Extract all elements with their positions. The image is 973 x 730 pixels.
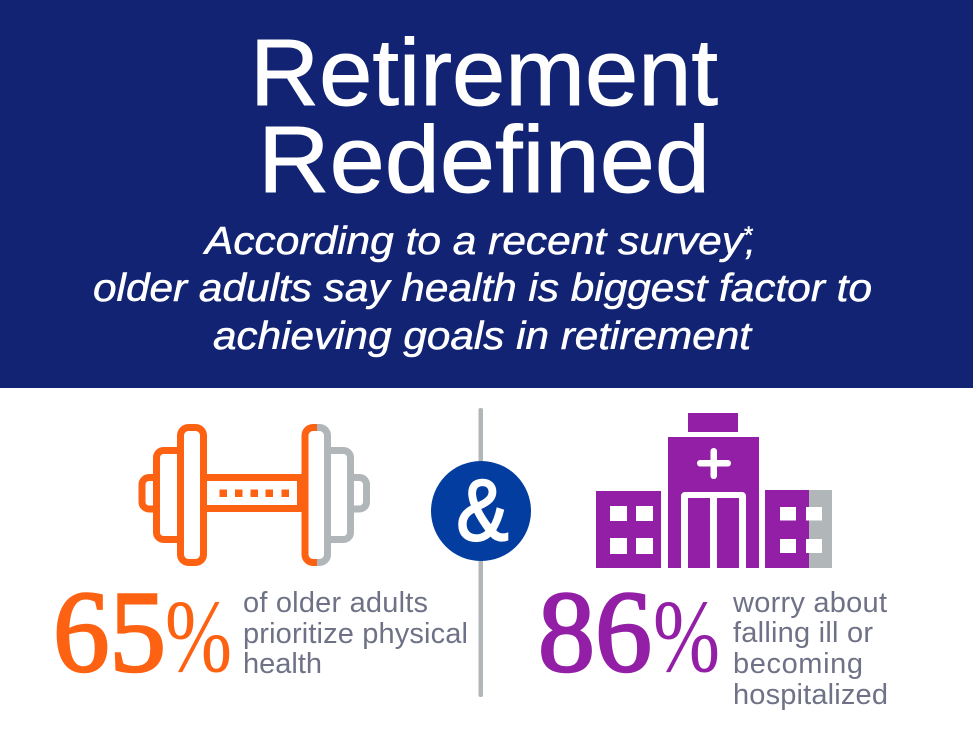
stat: 65 percent [53, 568, 232, 697]
header panel [0, 0, 973, 388]
center divider [478, 408, 483, 697]
title [250, 20, 718, 213]
subtitle [93, 220, 872, 358]
text: hospitalization description: hospitalized [733, 679, 888, 711]
subtitle: achieving goals in retirement [213, 315, 754, 358]
icon: hospital [596, 413, 832, 568]
stat: 86 percent: 86 [538, 568, 652, 697]
title: Redefined [258, 107, 710, 213]
stat: 86 percent [538, 568, 720, 697]
title: Retirement [250, 20, 718, 126]
icon: dumbbell [142, 428, 366, 562]
stat: 65 percent: 65 [53, 568, 166, 697]
stat: 65 percent: % [165, 579, 232, 694]
ampersand badge [431, 461, 531, 561]
subtitle: * [743, 222, 753, 249]
text: physical health description [243, 587, 468, 680]
text: hospitalization description: falling ill or [733, 617, 873, 649]
text: physical health description: prioritize physical [243, 618, 468, 650]
text: physical health description: health [243, 648, 322, 680]
subtitle: older adults say health is biggest factor to [93, 267, 872, 310]
text: hospitalization description: worry about [732, 587, 887, 619]
text: physical health description: of older adults [243, 587, 428, 619]
stat: 86 percent: % [653, 579, 720, 694]
text: hospitalization description: becoming [733, 648, 863, 680]
subtitle: According to a recent survey [203, 220, 746, 263]
subtitle: , [745, 220, 756, 263]
ampersand badge: & [456, 462, 508, 559]
text: hospitalization description [732, 587, 888, 711]
